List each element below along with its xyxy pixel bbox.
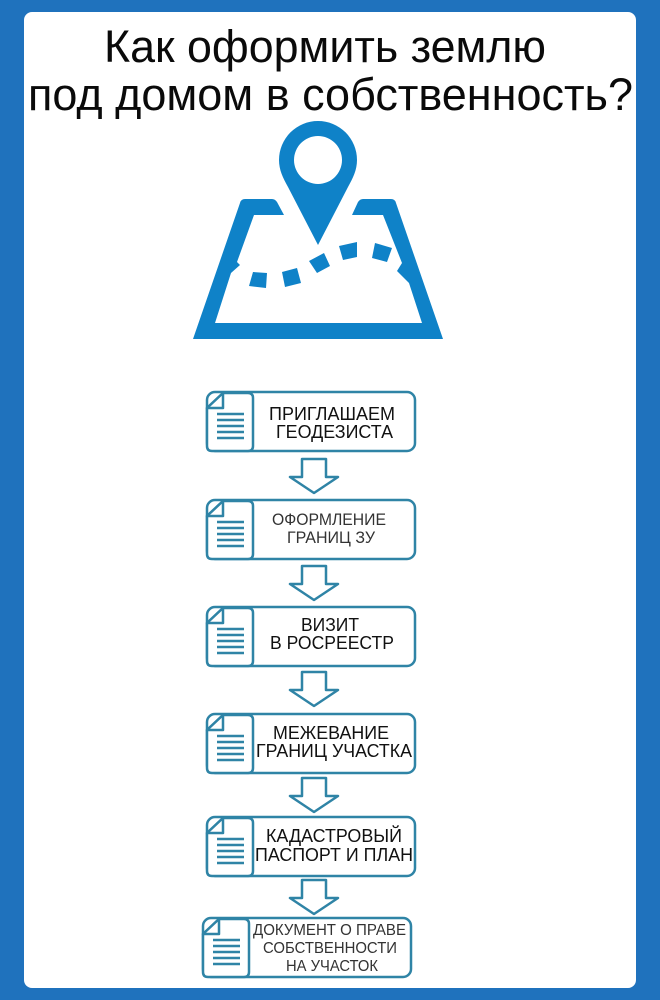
arrow 3: [290, 672, 338, 706]
step 5: КАДАСТРОВЫЙ: [266, 825, 402, 846]
step 6: НА УЧАСТОК: [286, 958, 379, 975]
title: [28, 21, 633, 120]
arrow 5: [290, 880, 338, 914]
title: под домом в собственность?: [28, 69, 633, 120]
icon: location pin: [279, 121, 357, 245]
icon: map outline: [193, 199, 443, 339]
step 3: [207, 607, 415, 666]
step 4: [207, 714, 415, 773]
step 6: ДОКУМЕНТ О ПРАВЕ: [253, 922, 406, 939]
step 1: [207, 392, 415, 451]
step 1: ГЕОДЕЗИСТА: [276, 422, 393, 442]
step 4: МЕЖЕВАНИЕ: [273, 723, 389, 743]
step 1: ПРИГЛАШАЕМ: [269, 404, 395, 424]
step 5: ПАСПОРТ И ПЛАН: [255, 845, 413, 865]
arrow 2: [290, 566, 338, 600]
icon: dotted route: [249, 242, 392, 288]
step 2: ГРАНИЦ ЗУ: [287, 528, 375, 547]
step 4: ГРАНИЦ УЧАСТКА: [256, 741, 412, 761]
step 6: СОБСТВЕННОСТИ: [263, 940, 397, 957]
step 2: [207, 500, 415, 559]
title: Как оформить землю: [104, 21, 546, 72]
step 6: [203, 918, 411, 977]
step 2: ОФОРМЛЕНИЕ: [272, 510, 386, 529]
step 5: [207, 817, 415, 876]
step 3: ВИЗИТ: [301, 615, 359, 635]
arrow 4: [290, 778, 338, 812]
arrow 1: [290, 459, 338, 493]
step 3: В РОСРЕЕСТР: [270, 633, 394, 653]
icon: map with location pin: [193, 121, 443, 339]
